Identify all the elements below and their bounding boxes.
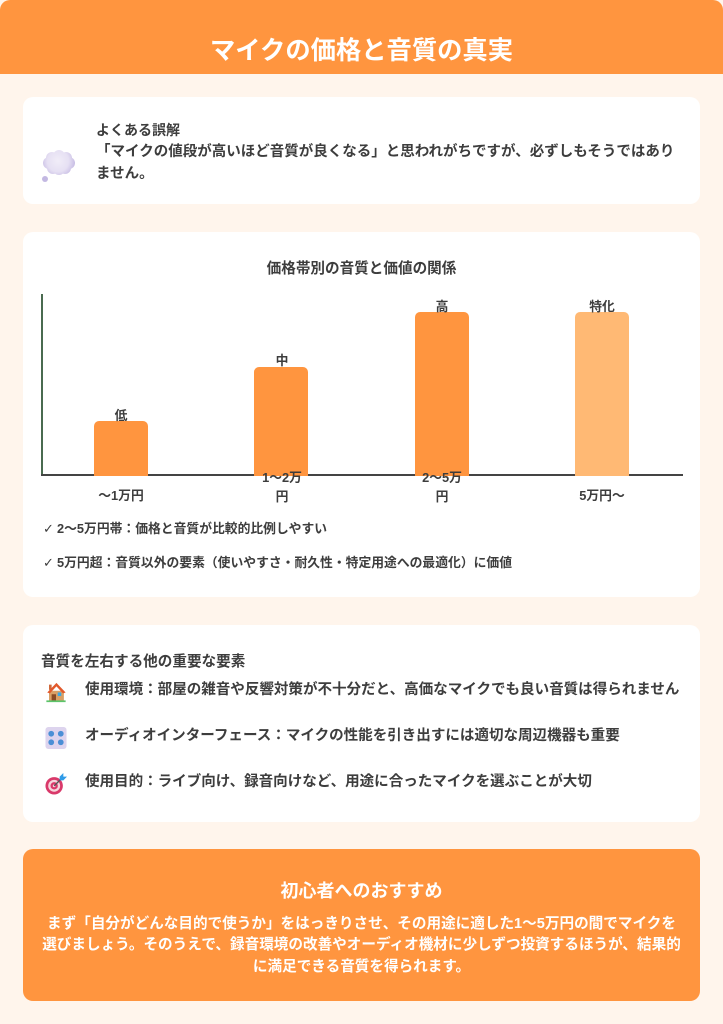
misconception body: 「マイクの値段が高いほど音質が良くなる」と思われがちですが、必ずしもそうではあり [96,144,674,160]
price: 2 to 5: 2〜5万 [422,470,462,485]
price: 2 to 5: 円 [436,489,448,504]
factor: environment: 使用環境：部屋の雑音や反響対策が不十分だと、高価なマイクでも良い音質は得られません [85,682,679,698]
header banner [0,0,723,74]
icon: control panel [46,727,66,749]
label: mid: 中 [276,353,288,368]
icon: thought bubble [42,150,75,182]
price: 1 to 2: 1〜2万 [262,470,302,485]
panel: chart [23,232,700,597]
price: under 1: 〜1万円 [98,488,144,503]
recommendation body [42,915,681,975]
note: over 5: 5万円超：音質以外の要素（使いやすさ・耐久性・特定用途への最適化）に価値 [57,555,512,570]
chart title: 価格帯別の音質と価値の関係 [267,261,456,277]
note: 2 to 5: ✓ [43,522,54,537]
panel: recommendation [23,849,700,1001]
factor: audio interface: オーディオインターフェース：マイクの性能を引き出すには適切な周辺機器も重要 [85,728,620,744]
bar: high [415,312,469,476]
factor: purpose: 使用目的：ライブ向け、録音向けなど、用途に合ったマイクを選ぶことが大切 [85,774,592,790]
x axis [41,474,683,476]
y axis [41,294,43,475]
price: 1 to 2 [262,470,302,504]
recommendation body: まず「自分がどんな目的で使うか」をはっきりさせ、その用途に適した1〜5万円の間でマイクを [47,916,676,932]
recommendation heading: 初心者へのおすすめ [280,881,442,901]
misconception heading: よくある誤解 [96,122,180,138]
title: マイクの価格と音質の真実 [210,37,513,65]
price: 1 to 2: 円 [276,489,288,504]
recommendation body: 選びましょう。そのうえで、録音環境の改善やオーディオ機材に少しずつ投資するほうが、結果的 [42,937,681,953]
panel: misconception [23,97,700,204]
label: high: 高 [436,299,448,314]
recommendation body: に満足できる音質を得られます。 [253,959,470,975]
icon: target [45,773,67,794]
price: 2 to 5 [422,470,462,504]
panel: other factors [23,625,700,822]
label: low: 低 [115,408,127,423]
label: specialized: 特化 [589,299,615,314]
icon: house [46,682,66,702]
misconception body: ません。 [96,166,154,182]
price: over 5: 5万円〜 [579,488,625,503]
note: 2 to 5: 2〜5万円帯：価格と音質が比較的比例しやすい [57,521,327,536]
bar: low [94,421,148,476]
bar: mid [254,367,308,476]
bar: specialized [575,312,629,476]
note: over 5: ✓ [43,556,54,571]
bar chart [41,294,683,504]
misconception body [96,143,674,182]
factors heading: 音質を左右する他の重要な要素 [41,654,245,670]
